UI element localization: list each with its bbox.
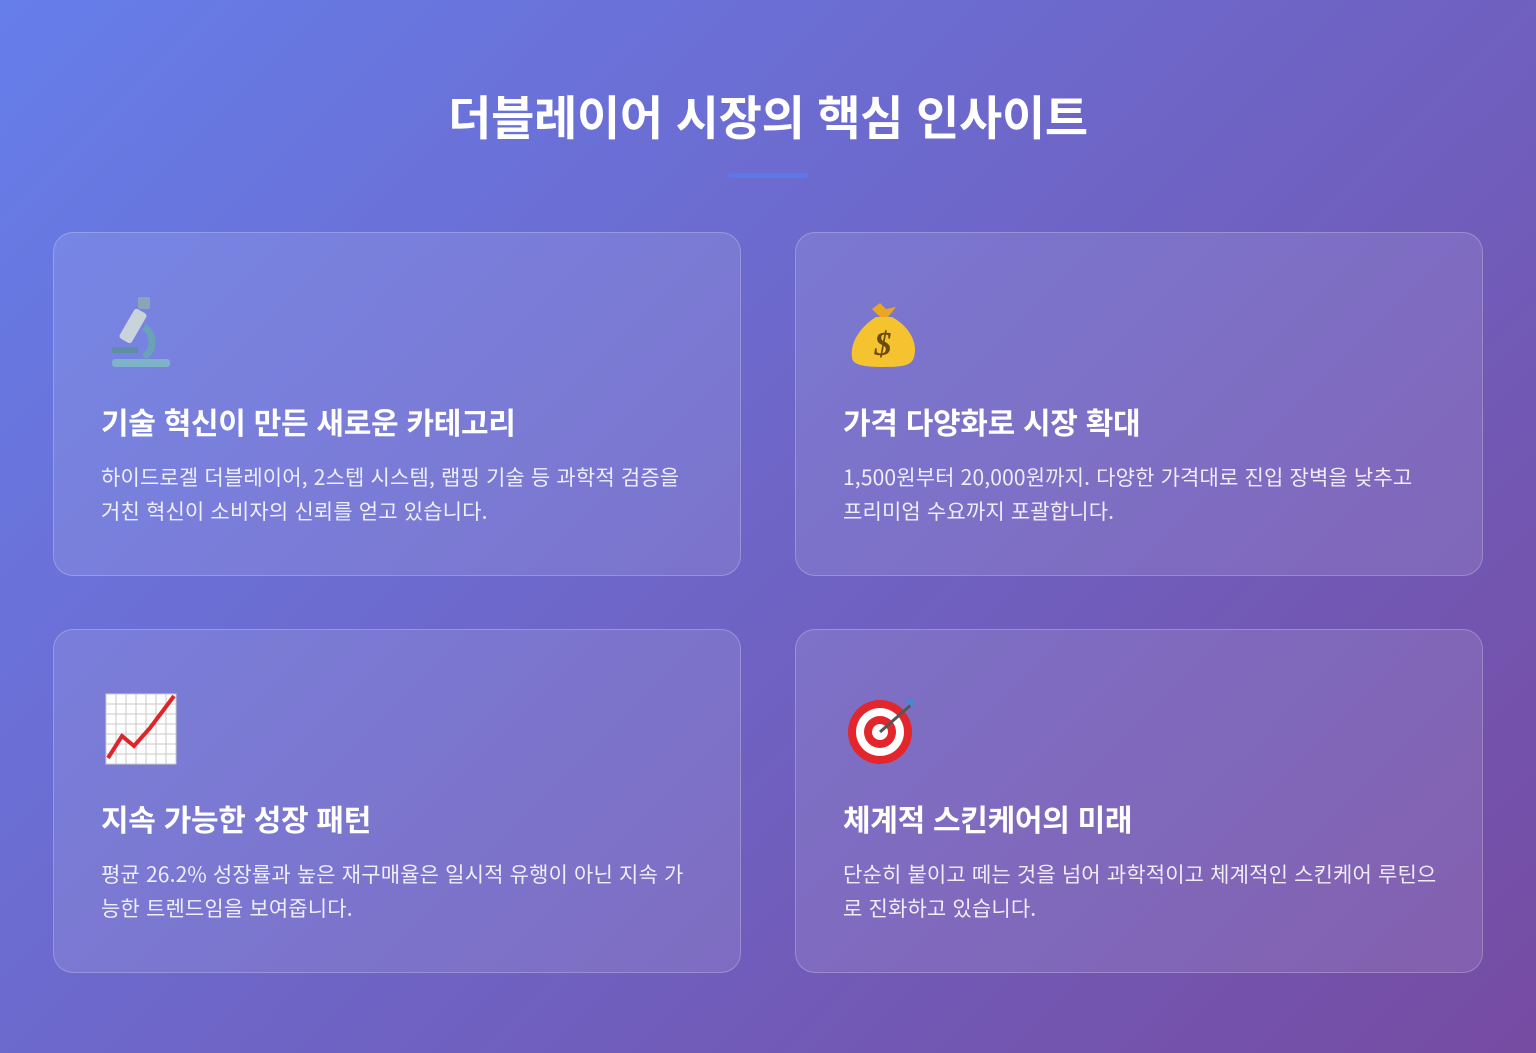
icon: chart	[106, 694, 176, 764]
heading: 기술 혁신이 만든 새로운 카테고리	[101, 399, 516, 443]
text: 평균 26.2% 성장률과 높은 재구매율은 일시적 유행이 아닌 지속 가	[101, 859, 683, 889]
text: 단순히 붙이고 떼는 것을 넘어 과학적이고 체계적인 스킨케어 루틴으	[843, 859, 1436, 889]
panel: price diversification	[795, 232, 1483, 576]
text	[101, 462, 679, 526]
text: 프리미엄 수요까지 포괄합니다.	[843, 496, 1114, 526]
panel: sustainable growth	[53, 629, 741, 973]
text: 1,500원부터 20,000원까지. 다양한 가격대로 진입 장벽을 낮추고	[843, 462, 1412, 492]
text: 로 진화하고 있습니다.	[843, 893, 1036, 923]
heading: 지속 가능한 성장 패턴	[101, 796, 371, 840]
icon: target	[848, 700, 914, 764]
icon: microscope	[112, 297, 170, 367]
text: 거친 혁신이 소비자의 신뢰를 얻고 있습니다.	[101, 496, 488, 526]
text: 하이드로겔 더블레이어, 2스텝 시스템, 랩핑 기술 등 과학적 검증을	[101, 462, 679, 492]
icon: money bag	[852, 303, 915, 367]
icon: money bag: $	[874, 326, 892, 363]
panel: tech innovation	[53, 232, 741, 576]
heading: 체계적 스킨케어의 미래	[843, 796, 1132, 840]
heading: 가격 다양화로 시장 확대	[843, 399, 1140, 443]
text	[843, 859, 1436, 923]
panel: future of skincare	[795, 629, 1483, 973]
title: 더블레이어 시장의 핵심 인사이트	[448, 80, 1088, 149]
text: 능한 트렌드임을 보여줍니다.	[101, 893, 353, 923]
text	[101, 859, 683, 923]
text	[843, 462, 1412, 526]
